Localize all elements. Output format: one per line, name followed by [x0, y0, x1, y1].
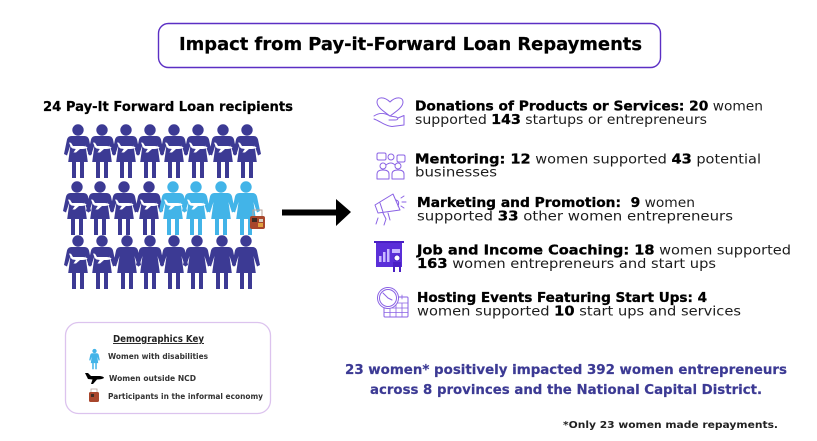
row 1 figures [64, 124, 261, 178]
row 3 figures [64, 235, 260, 289]
icon: megaphone [375, 194, 406, 225]
summary statement: 23 women* positively impacted 392 women entrepreneurs [345, 363, 787, 378]
item: coaching: 163 women entrepreneurs and start ups [417, 257, 716, 272]
arrow [282, 199, 351, 226]
icon: mentoring group [377, 153, 405, 179]
icon: informal economy bag [250, 210, 265, 229]
footnote: *Only 23 women made repayments. [563, 420, 778, 431]
heading: recipients: 24 Pay-It Forward Loan recipients [43, 99, 293, 115]
title [158, 24, 660, 68]
summary statement: across 8 provinces and the National Capital District. [370, 383, 762, 398]
donations text: Donations of Products or Services: 20 women [415, 100, 763, 114]
key label: disabilities: Women with disabilities [108, 351, 208, 361]
key heading: Demographics Key [113, 334, 205, 345]
item: coaching [374, 241, 791, 272]
mentoring text: Mentoring: 12 women supported 43 potential [415, 152, 761, 168]
item: hosting events [378, 288, 741, 320]
item: mentoring [377, 152, 761, 180]
item: donations [374, 98, 763, 128]
panel: demographics key [66, 322, 270, 414]
key label: outside NCD: Women outside NCD [109, 373, 196, 383]
key icon: plane [85, 373, 104, 384]
item: hosting events: women supported 10 start ups and services [417, 304, 741, 320]
key icon: woman with disability [89, 349, 100, 369]
key label: informal economy: Participants in the informal economy [108, 391, 264, 401]
hosting text: Hosting Events Featuring Start Ups: 4 [417, 291, 707, 306]
key icon: bag [89, 389, 99, 402]
coaching text: Job and Income Coaching: 18 women supported [416, 244, 791, 258]
item: marketing [375, 194, 733, 225]
summary statement [345, 363, 787, 398]
icon: presentation board [374, 241, 404, 272]
marketing text: Marketing and Promotion: 9 women [417, 196, 695, 211]
icon: clock and calendar [378, 288, 408, 317]
item: marketing: supported 33 other women entrepreneurs [417, 210, 733, 224]
icon: heart in hand [374, 98, 404, 126]
item: donations: supported 143 startups or entrepreneurs [415, 113, 707, 128]
title: Impact from Pay-it-Forward Loan Repayments [179, 35, 642, 55]
row 2 figures [63, 181, 260, 235]
item: mentoring: businesses [415, 166, 497, 180]
pictogram: 24 loan recipients [63, 124, 265, 289]
